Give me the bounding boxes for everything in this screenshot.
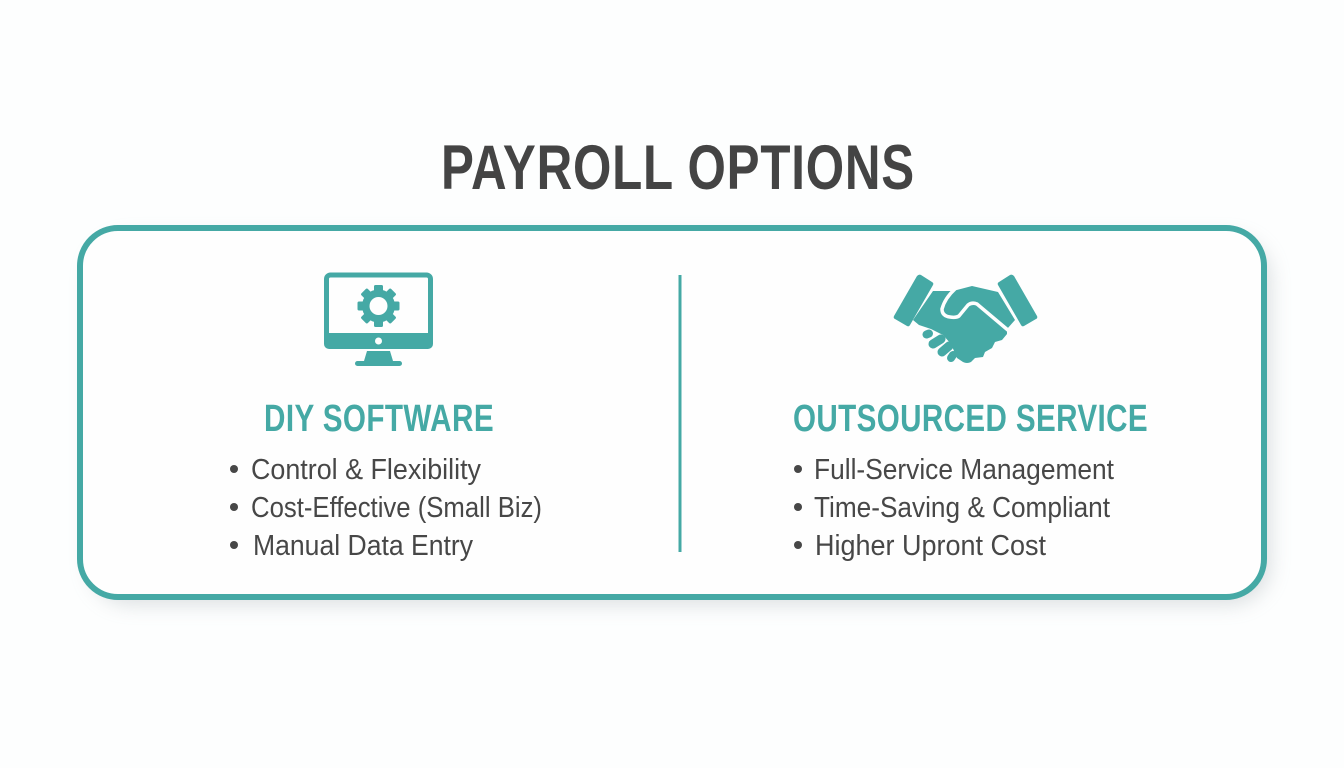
icon: handshake bbox=[894, 275, 1037, 363]
list: DIY software points: Cost-Effective (Small Biz) bbox=[251, 492, 542, 524]
list: outsourced service points: Full-Service Management bbox=[814, 454, 1114, 486]
heading: outsourced service: OUTSOURCED SERVICE bbox=[793, 398, 1148, 440]
list: outsourced service points bbox=[794, 454, 1114, 562]
column: outsourced service bbox=[793, 275, 1148, 562]
list: outsourced service points: Time-Saving & Compliant bbox=[814, 492, 1110, 524]
divider between options bbox=[678, 275, 682, 552]
heading: DIY software: DIY SOFTWARE bbox=[264, 398, 494, 440]
list: DIY software points: Control & Flexibility bbox=[251, 454, 481, 486]
list: outsourced service points: Higher Upront Cost bbox=[815, 530, 1046, 562]
column: DIY software bbox=[230, 275, 542, 562]
title: PAYROLL OPTIONS bbox=[441, 133, 915, 203]
icon: computer monitor with gear bbox=[324, 275, 433, 366]
panel: payroll options comparison bbox=[80, 228, 1270, 604]
list: DIY software points bbox=[230, 454, 542, 562]
list: DIY software points: Manual Data Entry bbox=[253, 530, 473, 562]
